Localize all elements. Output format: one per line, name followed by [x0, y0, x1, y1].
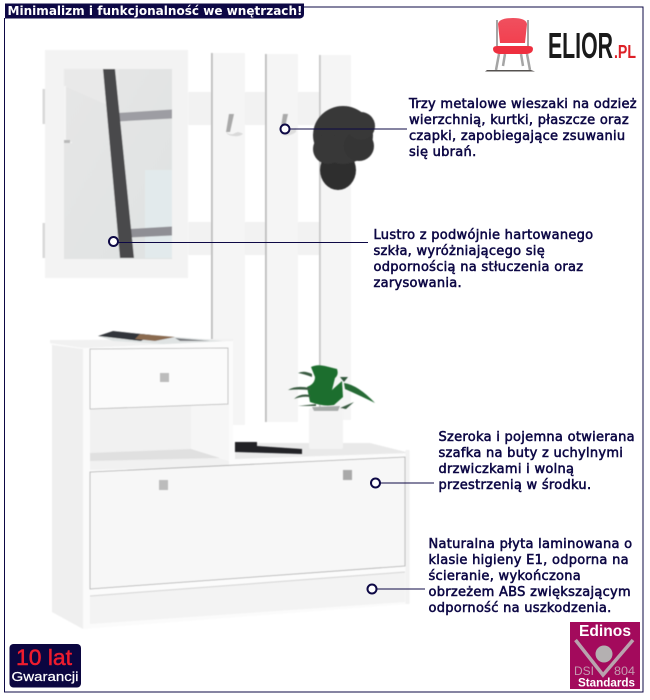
logo: Elior.pl [485, 18, 636, 72]
callout: shoe cabinet: przestrzenią w środku. [438, 478, 591, 493]
magazine [98, 331, 223, 344]
callout: laminated board: obrzeżem ABS zwiększającym [428, 585, 631, 600]
callout: laminated board [368, 537, 632, 616]
callout: mirror: zarysowania. [374, 276, 462, 291]
badge: Edinos standards: DSI [574, 664, 594, 678]
badge: Edinos standards: Standards [578, 676, 635, 690]
callout: mirror [109, 228, 593, 291]
callout: hooks: się ubrań. [409, 145, 476, 160]
callout: shoe cabinet: drzwiczkami i wolną [438, 462, 574, 477]
badge: 10 lat gwarancji: Gwarancji [12, 669, 79, 684]
shoe cabinet [50, 339, 410, 629]
black object on shelf [235, 442, 302, 454]
badge: Edinos standards: 804 [614, 664, 635, 678]
mirror [42, 50, 188, 278]
hat [313, 106, 375, 190]
icon: red chair [485, 18, 535, 72]
title banner: Minimalizm i funkcjonalność we wnętrzach! [8, 3, 302, 18]
callout: hooks: czapki, zapobiegające zsuwaniu [409, 129, 625, 144]
badge: Edinos standards [570, 622, 640, 690]
icon: wall hooks [226, 114, 296, 136]
callout: mirror: szkła, wyróżniającego się [374, 244, 545, 259]
callout: shoe cabinet: Szeroka i pojemna otwierana [438, 430, 635, 445]
callout: hooks [280, 97, 637, 160]
logo: Elior.pl: .PL [614, 42, 636, 62]
callout: laminated board: ścieranie, wykończona [428, 569, 581, 584]
callout: shoe cabinet [371, 430, 635, 493]
callout: hooks: wierzchnią, kurtki, płaszcze oraz [409, 113, 629, 128]
callout: mirror: odpornością na stłuczenia oraz [374, 260, 583, 275]
badge: 10 lat gwarancji: 10 lat [16, 645, 72, 670]
callout: mirror: Lustro z podwójnie hartowanego [374, 228, 593, 243]
callout: laminated board: Naturalna płyta laminowana o [428, 537, 632, 552]
callout: laminated board: odporność na uszkodzenia. [428, 601, 612, 616]
coat rack panel [188, 53, 351, 425]
badge: 10 lat gwarancji [10, 644, 81, 688]
plant in pot [288, 365, 375, 449]
callout: hooks: Trzy metalowe wieszaki na odzież [408, 97, 637, 112]
icon: cabinet knobs [159, 373, 352, 490]
callout: laminated board: klasie higieny E1, odporna na [428, 553, 629, 568]
callout: shoe cabinet: szafka na buty z uchylnymi [438, 446, 623, 461]
badge: Edinos standards: Edinos [579, 623, 631, 640]
